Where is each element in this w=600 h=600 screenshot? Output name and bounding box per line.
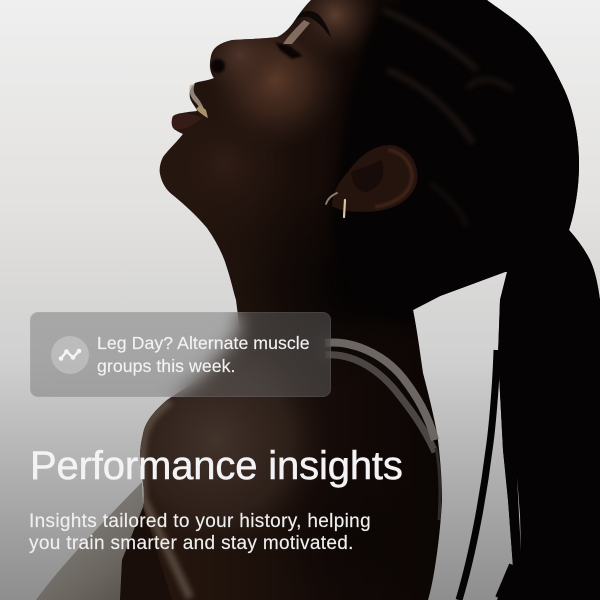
title: Performance insights — [30, 444, 403, 488]
callout text: groups this week. — [97, 356, 236, 376]
subtitle text: Insights tailored to your history, helping — [29, 511, 371, 532]
hair and ponytail solid — [400, 0, 600, 600]
second braid strand — [499, 565, 513, 598]
body, face and hair silhouette — [120, 0, 600, 600]
earrings — [326, 193, 345, 217]
callout text: Leg Day? Alternate muscle — [97, 333, 310, 353]
cornrow highlights — [383, 10, 513, 227]
loose braid strand — [459, 350, 497, 600]
icon: activity trend line — [51, 336, 89, 374]
subtitle text — [29, 511, 371, 554]
facial details — [172, 11, 331, 130]
grey fabric at lower left — [36, 482, 190, 600]
sports bra strap — [325, 343, 440, 520]
callout card: leg day tip — [30, 312, 331, 397]
subtitle text: you train smarter and stay motivated. — [29, 532, 354, 554]
background sliver between braids — [517, 477, 521, 552]
shoulder rim and arm fold — [142, 401, 190, 598]
ear — [332, 145, 418, 212]
hair mass edge — [330, 5, 480, 330]
skin lighting — [164, 110, 256, 220]
callout text — [97, 333, 310, 376]
